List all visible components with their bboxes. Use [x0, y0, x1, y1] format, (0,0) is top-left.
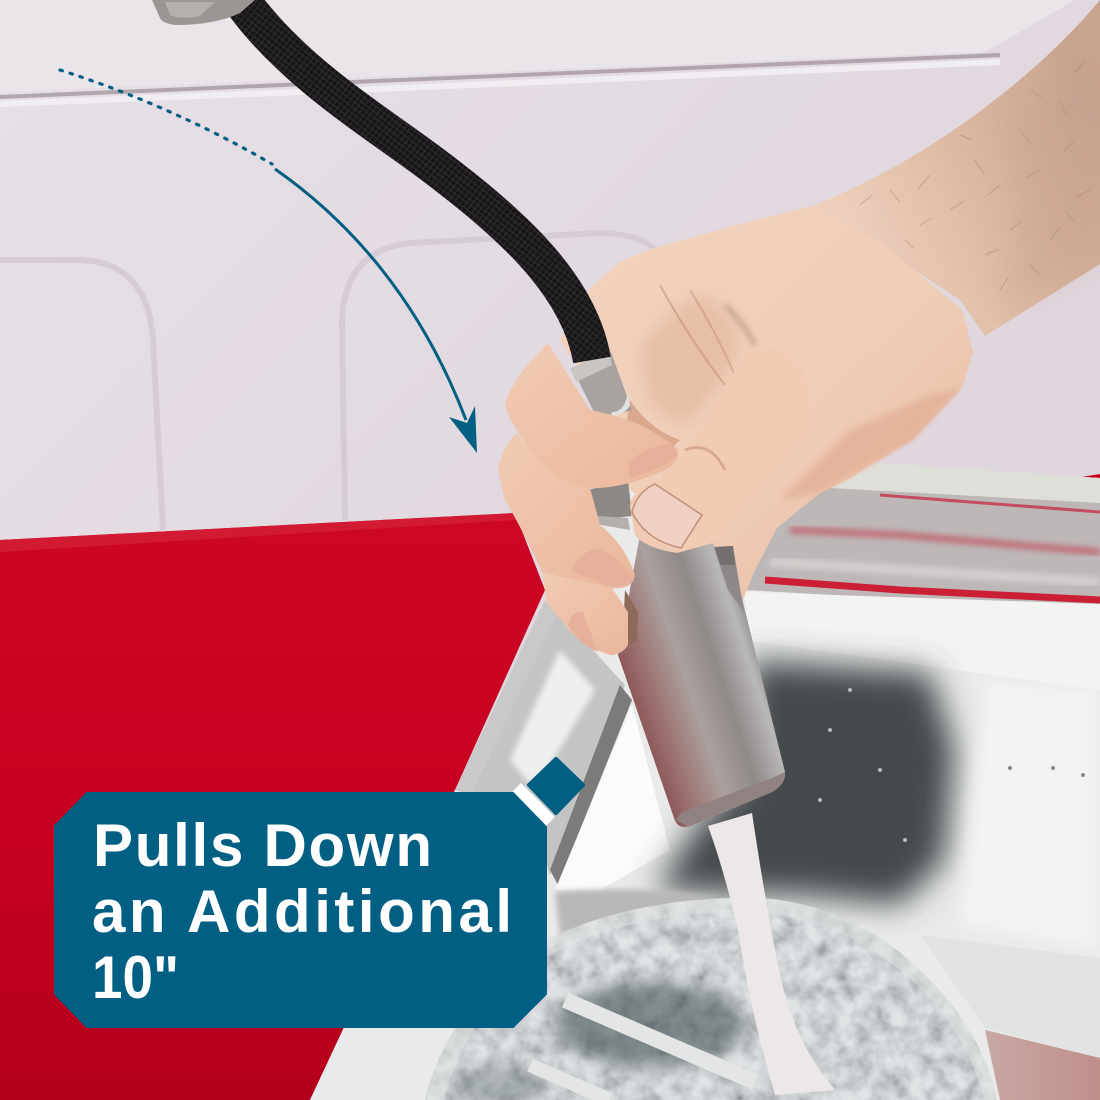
hand: index finger: [505, 343, 678, 488]
arrow: dotted curve pulling down: [60, 70, 477, 453]
water stream: [708, 813, 835, 1095]
hand: middle finger: [498, 433, 635, 588]
red cutting board: [0, 474, 1100, 1100]
hose and faucet neck: [152, 0, 592, 360]
forearm with hair: [815, 0, 1100, 336]
callout: pulls down: [55, 759, 583, 1027]
callout box: [55, 793, 546, 1027]
callout text: an Additional: [92, 878, 512, 945]
callout text: Pulls Down: [93, 812, 432, 879]
hand: thumb: [630, 347, 813, 553]
callout text: 10": [92, 944, 179, 1011]
callout text: [92, 812, 512, 1011]
icon: callout diamond: [529, 759, 583, 813]
hand: palm: [560, 205, 973, 607]
sprayer head: [618, 535, 785, 827]
connector and shaft: [570, 352, 632, 530]
hand: ring finger: [542, 572, 638, 655]
wire bowl with water: [420, 890, 1010, 1100]
dark reflection in basin: [655, 660, 955, 905]
stainless steel sink: [310, 463, 1100, 1100]
